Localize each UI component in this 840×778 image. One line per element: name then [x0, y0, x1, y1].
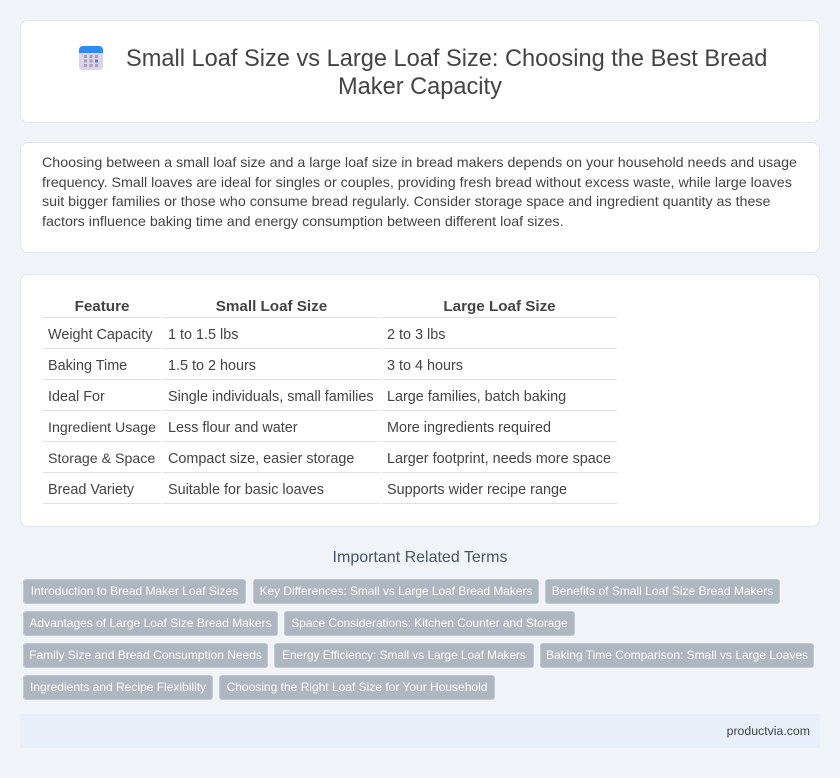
- panel: title header: [20, 20, 820, 123]
- table row: weight capacity: 2 to 3 lbs: [387, 327, 445, 343]
- table row: bread variety: Bread Variety: [48, 482, 134, 498]
- table row: ingredient usage: [43, 420, 617, 442]
- heading: important related terms: Important Related Terms: [333, 549, 507, 566]
- tag: [274, 643, 534, 668]
- table row: bread variety: Suitable for basic loaves: [168, 482, 324, 498]
- related terms tags: [23, 579, 814, 700]
- text block: introduction paragraph: [42, 155, 797, 230]
- table row: baking time: 3 to 4 hours: [387, 358, 463, 374]
- table row: ideal for: Ideal For: [48, 389, 105, 405]
- panel: introduction: [20, 142, 820, 253]
- tag: Energy Efficiency: Small vs Large Loaf Makers: [282, 648, 526, 662]
- tag: [23, 611, 278, 636]
- table row: storage and space: Compact size, easier storage: [168, 451, 354, 467]
- table row: storage and space: Larger footprint, needs more space: [387, 451, 611, 467]
- table row: weight capacity: [43, 327, 617, 349]
- table row: baking time: 1.5 to 2 hours: [168, 358, 256, 374]
- text block: introduction paragraph: Choosing between a small loaf size and a large loaf size in bread makers depends on your household needs and usage: [42, 155, 797, 171]
- tag: [284, 611, 575, 636]
- text block: introduction paragraph: frequency. Small loaves are ideal for singles or couples, providing fresh bread without excess waste, while large loaves: [42, 175, 792, 191]
- table row: ingredient usage: Less flour and water: [168, 420, 298, 436]
- tag: [23, 675, 213, 700]
- table row: bread variety: Supports wider recipe range: [387, 482, 567, 498]
- tag: [219, 675, 495, 700]
- title: [126, 46, 767, 100]
- table row: baking time: Baking Time: [48, 358, 127, 374]
- tag: Advantages of Large Loaf Size Bread Makers: [29, 616, 272, 630]
- table row: ingredient usage: More ingredients required: [387, 420, 551, 436]
- table row: storage and space: Storage & Space: [48, 451, 155, 467]
- tag: Benefits of Small Loaf Size Bread Makers: [552, 584, 773, 598]
- tag: [23, 579, 246, 604]
- tag: [545, 579, 780, 604]
- table row: weight capacity: Weight Capacity: [48, 327, 153, 343]
- table row: bread variety: [43, 482, 617, 504]
- comparison table: [43, 298, 617, 504]
- title: Maker Capacity: [338, 74, 502, 100]
- table header row: Feature: [75, 298, 129, 315]
- table header row: Small Loaf Size: [216, 298, 327, 315]
- tag: Space Considerations: Kitchen Counter and Storage: [291, 616, 568, 630]
- tag: Choosing the Right Loaf Size for Your Household: [227, 680, 487, 694]
- tag: Introduction to Bread Maker Loaf Sizes: [31, 584, 238, 598]
- table header row: Large Loaf Size: [443, 298, 556, 315]
- table row: ingredient usage: Ingredient Usage: [48, 420, 156, 436]
- footer bar: [20, 714, 820, 748]
- tag: [253, 579, 539, 604]
- tag: Family Size and Bread Consumption Needs: [29, 648, 262, 662]
- tag: Baking Time Comparison: Small vs Large Loaves: [546, 648, 808, 662]
- icon: calendar: [79, 46, 103, 70]
- table row: ideal for: Single individuals, small families: [168, 389, 374, 405]
- text block: introduction paragraph: suit bigger families or those who consume bread regularly. Consider storage space and ingredient quantity as these: [42, 194, 770, 210]
- table row: ideal for: Large families, batch baking: [387, 389, 566, 405]
- text block: introduction paragraph: factors influence baking time and energy consumption between different loaf sizes.: [42, 214, 564, 230]
- tag: [23, 643, 268, 668]
- title: Small Loaf Size vs Large Loaf Size: Choosing the Best Bread: [126, 46, 767, 72]
- table row: baking time: [43, 358, 617, 380]
- table row: storage and space: [43, 451, 617, 473]
- panel: comparison table: [20, 274, 820, 527]
- tag: Key Differences: Small vs Large Loaf Bread Makers: [260, 584, 532, 598]
- table row: weight capacity: 1 to 1.5 lbs: [168, 327, 238, 343]
- footer source credit: productvia.com: [727, 724, 810, 738]
- tag: [540, 643, 814, 668]
- tag: Ingredients and Recipe Flexibility: [30, 680, 206, 694]
- table row: ideal for: [43, 389, 617, 411]
- table header row: [43, 298, 617, 318]
